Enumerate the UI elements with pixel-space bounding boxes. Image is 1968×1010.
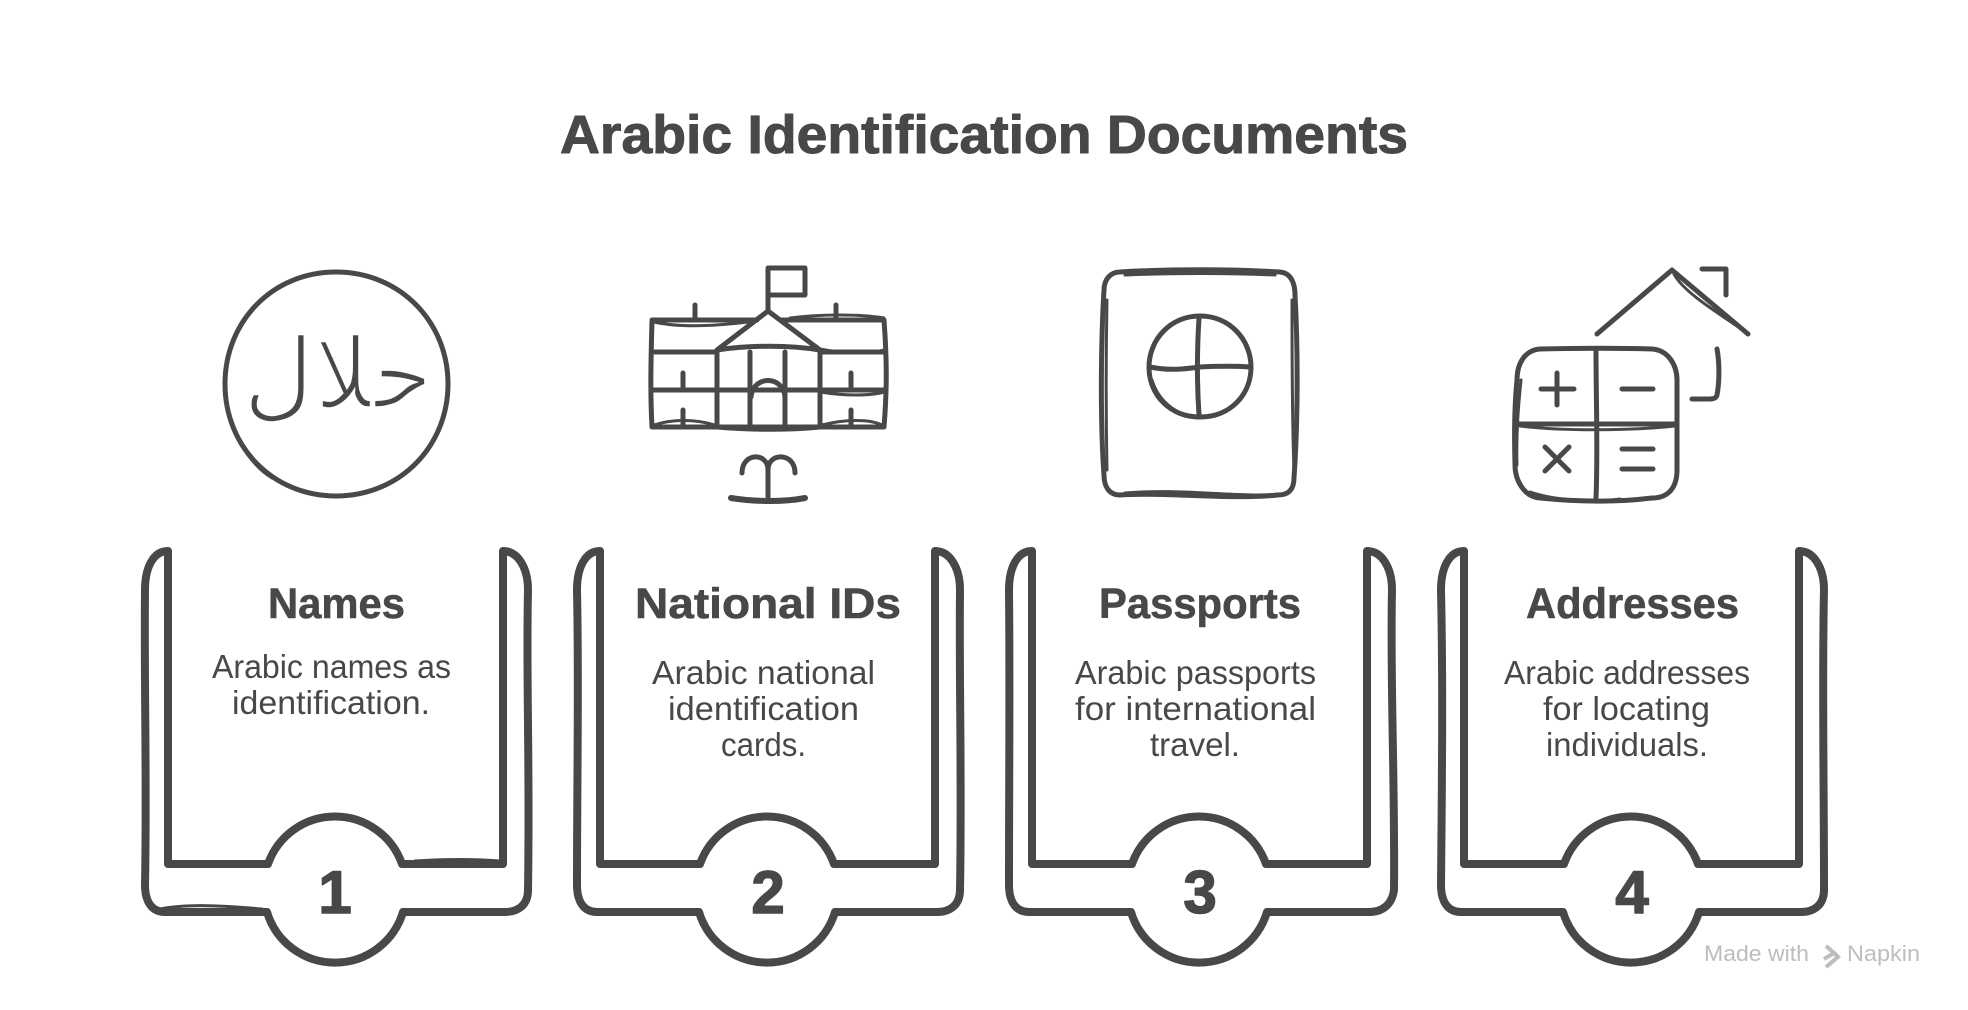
icon: government building with fountain (651, 268, 886, 501)
description: passports: for international (1075, 690, 1316, 727)
watermark: made with napkin (1704, 941, 1920, 967)
icon: calculator with house (1515, 269, 1748, 501)
description: addresses: individuals. (1546, 726, 1708, 763)
description: names: Arabic names as (212, 648, 451, 685)
heading: addresses: Addresses (1526, 580, 1739, 628)
panel: names (145, 272, 529, 963)
description: addresses: for locating (1543, 690, 1710, 727)
description: national IDs: cards. (721, 726, 806, 763)
description: passports: Arabic passports (1075, 654, 1316, 691)
description: national IDs: identification (668, 690, 859, 727)
description: addresses: Arabic addresses (1504, 654, 1750, 691)
card frame 4 (1441, 551, 1824, 963)
step number 4: 4 (1615, 859, 1649, 926)
panel: addresses (1441, 269, 1824, 963)
description: national IDs: Arabic national (652, 654, 875, 691)
description: passports: travel. (1150, 726, 1240, 763)
card frame 3 (1009, 551, 1394, 963)
icon: passport (1101, 270, 1297, 497)
heading: passports: Passports (1099, 580, 1301, 628)
description: names: identification. (232, 684, 430, 721)
icon: halal seal: حلال (243, 318, 433, 432)
card frame 1 (145, 551, 529, 963)
watermark: made with napkin: Made with (1704, 941, 1809, 966)
step number 2: 2 (751, 859, 785, 926)
panel: passports (1009, 270, 1394, 963)
title: Arabic Identification Documents (560, 105, 1408, 165)
watermark: made with napkin: Napkin (1847, 941, 1920, 966)
heading: national IDs: National IDs (635, 580, 901, 628)
heading: names: Names (268, 580, 405, 628)
panel: national IDs (577, 268, 961, 963)
step number 3: 3 (1183, 859, 1217, 926)
step number 1: 1 (318, 859, 352, 926)
card frame 2 (577, 551, 961, 963)
icon: halal seal (225, 272, 448, 496)
